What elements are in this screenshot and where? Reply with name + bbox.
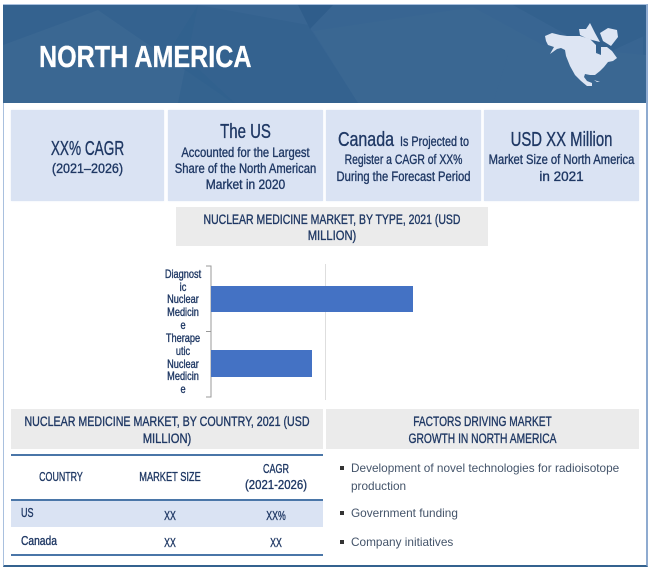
- table: MARKET SIZE: [139, 470, 201, 484]
- bar: diagnostic: [211, 286, 413, 312]
- heading: by type: NUCLEAR MEDICINE MARKET, BY TYPE, 2021 (USD: [204, 212, 460, 227]
- heading: factors: [326, 409, 639, 449]
- item 2: Government funding: [351, 506, 458, 520]
- bar: therapeutic: [211, 350, 312, 377]
- label: diagnostic: Diagnost: [165, 269, 201, 281]
- table: XX: [164, 536, 176, 550]
- heading: factors: FACTORS DRIVING MARKET: [413, 414, 552, 429]
- heading: by country: NUCLEAR MEDICINE MARKET, BY COUNTRY, 2021 (USD: [24, 414, 310, 429]
- card: The US: Market in 2020: [206, 177, 285, 192]
- row: US: US: [21, 506, 34, 520]
- card: Canada: Canada Is Projected to: [338, 129, 469, 151]
- row: Canada: Canada: [21, 534, 57, 548]
- card: Canada: [326, 110, 481, 201]
- table: CAGR: [263, 462, 289, 476]
- banner facets: [3, 5, 646, 103]
- table: XX: [164, 509, 176, 523]
- table: XX: [270, 536, 282, 550]
- card: market size: USD XX Million: [511, 129, 612, 151]
- item 1: Development of novel technologies for radioisotope: [351, 461, 619, 475]
- table header: COUNTRY: [39, 470, 83, 484]
- card: The US: The US: [220, 121, 271, 143]
- card: market size: in 2021: [539, 169, 584, 184]
- table rules and US row: [11, 454, 323, 457]
- label: therapeutic: Medicin: [167, 371, 199, 383]
- heading: by type: [176, 207, 488, 246]
- label: therapeutic: utic: [176, 346, 190, 358]
- card: Canada: Register a CAGR of XX%: [345, 152, 462, 167]
- label: therapeutic: e: [180, 384, 186, 396]
- item 3: Company initiatives: [351, 535, 453, 549]
- card: Canada: During the Forecast Period: [337, 169, 470, 184]
- card: CAGR: [11, 110, 164, 201]
- heading: by type: MILLION): [308, 228, 356, 243]
- table: (2021-2026): [245, 478, 307, 492]
- card: market size: Market Size of North America: [489, 152, 634, 167]
- list: market drivers: [340, 461, 619, 549]
- heading: by country: [11, 409, 323, 449]
- label: therapeutic: Nuclear: [167, 359, 199, 371]
- heading: by country: MILLION): [143, 431, 191, 446]
- table: [11, 454, 323, 556]
- title: NORTH AMERICA: [39, 39, 251, 74]
- card: The US: Accounted for the Largest: [181, 145, 310, 160]
- bar chart: [165, 264, 413, 400]
- card: CAGR: (2021–2026): [52, 161, 123, 176]
- label: diagnostic: e: [180, 320, 186, 332]
- heading: factors: GROWTH IN NORTH AMERICA: [408, 431, 557, 446]
- label: diagnostic: ic: [180, 282, 186, 294]
- card: CAGR: XX% CAGR: [51, 138, 124, 160]
- item 1: [340, 461, 619, 493]
- card: market size: [484, 110, 639, 201]
- label: diagnostic: Medicin: [167, 307, 199, 319]
- label: diagnostic: Nuclear: [167, 294, 199, 306]
- card: The US: [168, 110, 323, 201]
- item 1: production: [351, 479, 406, 493]
- icon: North America map: [545, 23, 618, 86]
- card: The US: Share of the North American: [175, 161, 316, 176]
- header banner: [3, 5, 646, 103]
- label: therapeutic: Therape: [166, 333, 200, 345]
- table: XX%: [266, 509, 286, 523]
